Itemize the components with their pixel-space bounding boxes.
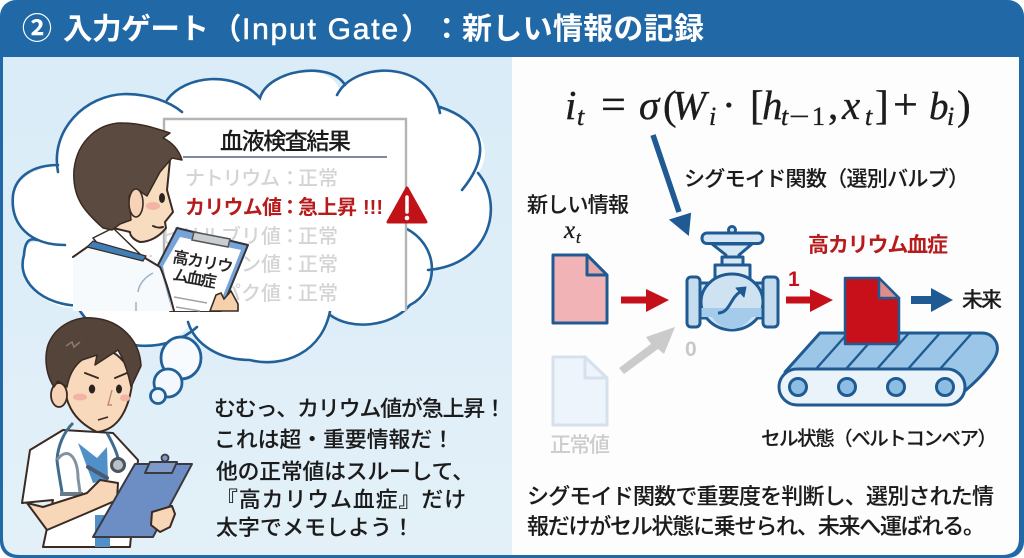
fold: [585, 357, 607, 378]
doctor with clipboard: [22, 318, 192, 547]
arrow: formula to valve: [653, 135, 690, 234]
coat: [22, 430, 138, 547]
right hand: [151, 506, 175, 532]
formula: [: [750, 82, 764, 128]
summary text: 報だけがセル状態に乗せられ、未来へ運ばれる。: [527, 514, 985, 539]
highlighted potassium row: [185, 196, 383, 219]
formula: W: [672, 82, 710, 128]
speech text: [214, 396, 506, 540]
icon: pink document: [553, 255, 607, 323]
title: （: [212, 13, 242, 46]
title: 入力ゲート: [63, 13, 209, 46]
blood test sheet: [141, 119, 426, 311]
formula: t: [781, 102, 789, 131]
fold: [879, 278, 899, 298]
icon: pale document: [553, 357, 607, 425]
normal rows: ：: [280, 283, 300, 305]
highlighted potassium row: 急上昇: [298, 196, 357, 219]
icon: warning triangle: [388, 188, 426, 222]
cell state label: セル状態（ベルトコンベア）: [761, 428, 997, 450]
arrow: to future: [911, 288, 953, 312]
normal rows: 正常: [298, 253, 338, 276]
title: ：: [432, 13, 462, 46]
new information label: 新しい情報: [527, 194, 629, 217]
normal rows: ：: [280, 226, 300, 248]
formula: =: [601, 80, 626, 129]
formula: ·: [722, 82, 736, 128]
normal rows: [141, 167, 338, 305]
title: ②: [22, 13, 52, 46]
summary text: シグモイド関数で重要度を判断し、選別された情: [527, 484, 994, 509]
formula: ]: [875, 82, 889, 128]
formula: (: [663, 82, 677, 128]
normal rows: 正常: [298, 225, 338, 248]
hair: [46, 318, 141, 387]
formula: t: [577, 102, 585, 131]
new information label: t: [576, 228, 582, 247]
doctor in thought: [73, 123, 248, 311]
sheet heading: 血液検査結果: [220, 128, 351, 154]
summary text: [527, 484, 994, 539]
high potassium label: 高カリウム血症: [808, 234, 948, 257]
highlighted potassium row: !!!: [363, 197, 383, 219]
normal rows: ：: [280, 168, 300, 190]
face details: [89, 384, 95, 394]
new information label: [527, 194, 629, 247]
normal rows: 正常: [298, 167, 338, 190]
normal rows: ビリルブリ値: [161, 224, 281, 248]
face: [113, 160, 173, 242]
highlighted potassium row: カリウム値: [185, 196, 282, 219]
panel: doctor story: [3, 57, 512, 555]
normal rows: タンパク値: [181, 282, 281, 305]
formula: 1: [812, 102, 825, 131]
speech text: 『高カリウム血症』だけ: [216, 487, 466, 512]
formula: h: [762, 82, 782, 128]
formula: i: [709, 102, 716, 131]
icon: thought bubbles: [150, 337, 201, 404]
number zero: 0: [685, 338, 697, 361]
normal value label: 正常値: [550, 434, 610, 457]
formula: b: [929, 85, 948, 128]
scrubs: [78, 443, 108, 483]
normal rows: 正常: [298, 282, 338, 305]
future label: 未来: [962, 289, 1002, 312]
arrow: valve to belt: [786, 289, 833, 312]
clipboard with memo: ム血症: [171, 266, 218, 292]
formula: σ: [639, 82, 661, 128]
panel: model diagram: [512, 57, 1019, 555]
title: Input Gate: [242, 13, 398, 46]
sigmoid label: シグモイド関数（選別バルブ）: [684, 167, 969, 191]
pen hand and arm: [27, 480, 118, 530]
new information label: x: [563, 217, 575, 244]
title: ）: [401, 13, 431, 46]
formula: i: [947, 102, 954, 131]
head: [65, 350, 133, 432]
speech text: 太字でメモしよう！: [216, 515, 414, 540]
normal rows: ：: [280, 254, 300, 276]
coat: [73, 243, 172, 311]
formula: t: [865, 102, 873, 131]
normal rows: ナトリウム: [185, 168, 280, 190]
icon: red document: [845, 278, 899, 344]
thought cloud: [13, 70, 491, 362]
formula: x: [841, 82, 860, 128]
clipboard with memo: [158, 228, 248, 311]
speech text: 他の正常値はスルーして、: [216, 459, 474, 484]
fold: [587, 255, 607, 275]
clipboard: [93, 464, 192, 537]
icon: valve: [687, 226, 778, 330]
title: 新しい情報の記録: [462, 13, 704, 46]
title: [22, 13, 704, 46]
speech text: むむっ、カリウム値が急上昇！: [214, 396, 506, 421]
hair: [74, 123, 182, 230]
formula: [565, 80, 971, 131]
number one: 1: [788, 268, 800, 291]
formula: ): [957, 82, 971, 128]
formula: ,: [828, 82, 838, 128]
formula: −: [789, 102, 810, 131]
formula: i: [565, 82, 576, 128]
formula: +: [893, 80, 918, 129]
speech text: これは超・重要情報だ！: [214, 427, 454, 452]
stethoscope: [57, 423, 124, 494]
arrow: input to valve: [621, 289, 669, 312]
normal rows: クレアチニン値: [141, 253, 281, 276]
clipboard with memo: 高カリウ: [171, 248, 235, 277]
highlighted potassium row: ：: [280, 197, 300, 219]
icon: conveyor belt: [779, 333, 997, 405]
arrow: normal value blocked: [619, 327, 675, 374]
